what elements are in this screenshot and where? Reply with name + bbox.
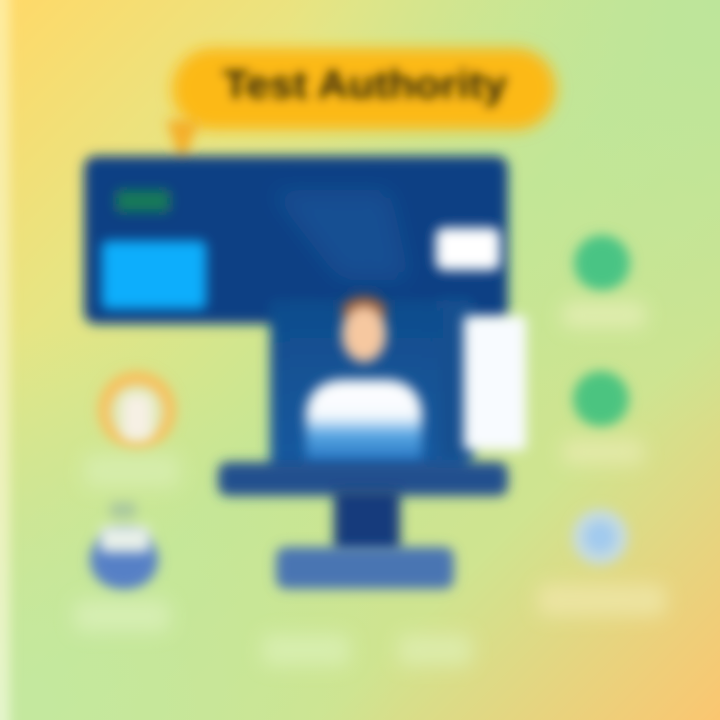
bottom label right [398,634,472,666]
monitor foot [276,547,454,589]
feature: green check middle [562,371,644,465]
monitor neck [334,490,400,552]
feature: blue badge [538,509,666,616]
monitor screen upper [84,156,508,324]
heading: Test Authority [223,63,508,107]
feature: green check top [562,235,646,328]
screen sheen [270,190,410,280]
white side panel [464,316,526,450]
screen right side [440,300,474,460]
feature: blue document badge [74,502,170,632]
person [306,296,422,466]
torso [306,380,422,466]
bottom label left [262,634,350,666]
white chat card [436,228,500,270]
monitor base bar [218,462,508,496]
title pill [166,48,556,164]
monitor [84,156,526,589]
monitor screen lower [270,300,468,474]
face [342,306,386,362]
feature: orange ring badge [84,371,180,488]
green chart label [116,190,170,212]
foreground content [74,48,666,666]
hair [342,296,386,324]
cyan panel [102,241,206,309]
